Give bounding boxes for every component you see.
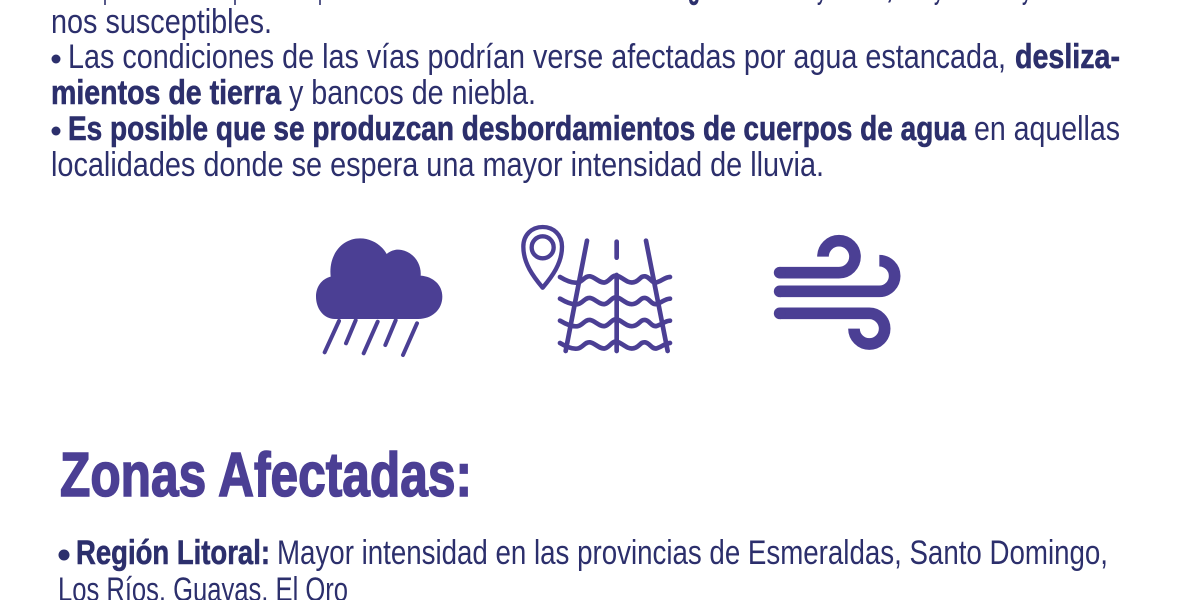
text block: recommendations: nos susceptibles.	[51, 3, 272, 41]
icon: rain cloud	[316, 238, 442, 355]
text block: recommendations: mientos de tierra	[51, 74, 282, 112]
text block: affected regions: Región Litoral:	[76, 534, 270, 572]
text block: recommendations	[51, 0, 1120, 184]
icon: flooded road with location pin	[523, 227, 670, 351]
icon: wind	[774, 241, 895, 344]
text block: recommendations: en aquellas	[974, 110, 1120, 148]
heading: Zonas Afectadas: Zonas Afectadas:	[60, 441, 472, 510]
text block: recommendations: Las condiciones de las vías podrían verse afectadas por agua estancada,	[68, 38, 1006, 76]
text block: affected regions	[58, 534, 1108, 600]
text block: recommendations: desliza-	[1015, 38, 1120, 76]
text block: recommendations: localidades donde se espera una mayor intensidad de lluvia.	[51, 146, 824, 184]
text block: recommendations: y bancos de niebla.	[289, 74, 536, 112]
text block: recommendations: Es posible que se produzcan desbordamientos de cuerpos de agua	[68, 110, 967, 148]
